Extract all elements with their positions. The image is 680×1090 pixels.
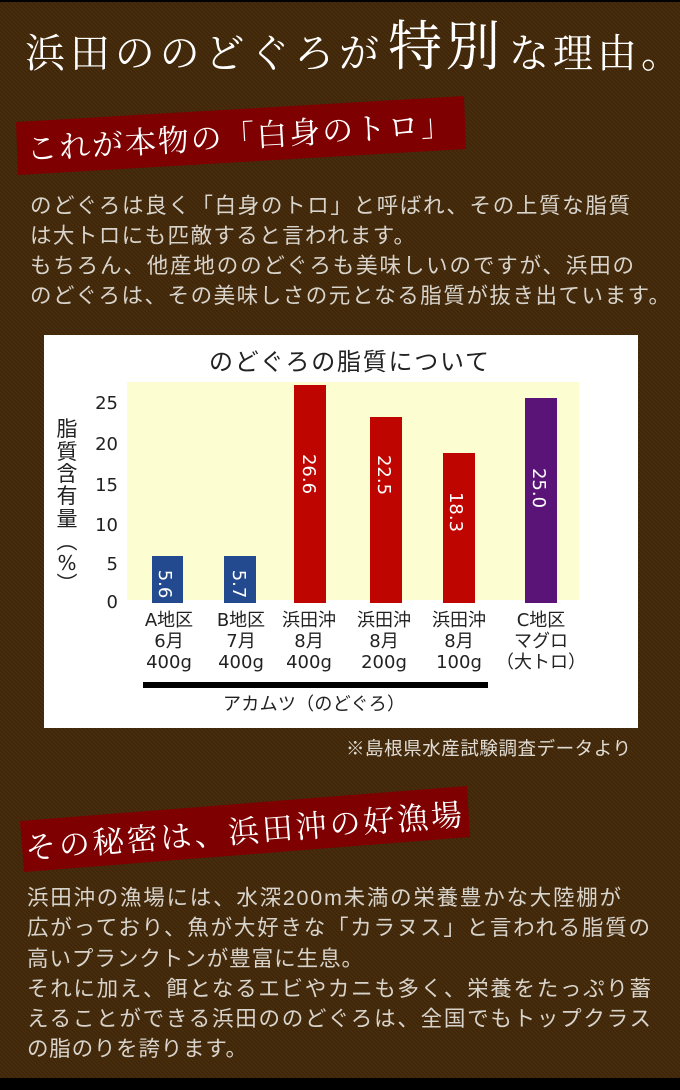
bar: B area 5.7 xyxy=(224,556,256,603)
y axis title: 有 xyxy=(56,485,78,508)
y axis tick labels: 5 xyxy=(107,554,118,575)
group bracket line xyxy=(143,682,488,688)
y axis title: （ xyxy=(54,530,77,552)
body text: fishing ground: 広がっており、魚が大好きな「カラヌス」と言われる脂質の xyxy=(27,916,650,940)
x axis category labels: 400g xyxy=(218,652,264,673)
bar: Hamada 100g 18.3: 18.3 xyxy=(445,492,466,532)
y axis title xyxy=(54,418,78,594)
body text: intro: もちろん、他産地ののどぐろも美味しいのですが、浜田の xyxy=(30,254,634,278)
y axis tick labels: 25 xyxy=(95,393,118,414)
x axis category labels: 8月 xyxy=(294,631,324,652)
title xyxy=(25,17,680,77)
y axis tick labels: 10 xyxy=(95,515,118,536)
title: な理由。 xyxy=(509,31,680,76)
y axis tick labels xyxy=(95,393,118,613)
bar: Hamada 400g 26.6: 26.6 xyxy=(298,454,319,494)
body text: fishing ground: それに加え、餌となるエビやカニも多く、栄養をたっぷり蓄 xyxy=(27,977,651,1001)
y axis title: ） xyxy=(54,572,77,594)
y axis tick labels: 15 xyxy=(95,475,118,496)
heading banner: real white-flesh toro: これが本物の「白身のトロ」 xyxy=(25,107,453,167)
body text: fishing ground: 浜田沖の漁場には、水深200m未満の栄養豊かな大陸棚が xyxy=(27,886,621,910)
title: 浜田ののどぐろが xyxy=(25,31,379,76)
x axis category labels: 6月 xyxy=(154,631,184,652)
chart title: のどぐろの脂質について xyxy=(209,349,489,376)
x axis category labels: 8月 xyxy=(369,631,399,652)
x axis category labels xyxy=(145,610,586,673)
title: 特別 xyxy=(388,17,500,77)
y axis title: 量 xyxy=(56,508,78,531)
bar: Hamada 400g 26.6 xyxy=(294,385,326,603)
body text: intro xyxy=(30,194,670,308)
x axis category labels: 400g xyxy=(146,652,192,673)
x axis category labels: 100g xyxy=(436,652,482,673)
bar: Hamada 200g 22.5 xyxy=(370,417,402,603)
x axis category labels: C地区 xyxy=(517,610,565,631)
body text: intro: は大トロにも匹敵すると言われます。 xyxy=(30,224,415,248)
y axis title: 含 xyxy=(56,463,78,486)
plot area xyxy=(127,382,579,600)
body text: fishing ground: の脂のりを誇ります。 xyxy=(27,1037,247,1061)
y axis title: % xyxy=(57,551,77,575)
bar: A area 5.6: 5.6 xyxy=(154,570,175,598)
x axis category labels: マグロ xyxy=(514,631,568,652)
source note: ※島根県水産試験調査データより xyxy=(346,738,631,759)
x axis category labels: （大トロ） xyxy=(496,652,586,673)
y axis title: 脂 xyxy=(56,418,78,441)
body text: intro: のどぐろは良く「白身のトロ」と呼ばれ、その上質な脂質 xyxy=(30,194,630,218)
bar: Hamada 200g 22.5: 22.5 xyxy=(373,455,394,495)
bar: C area tuna 25.0: 25.0 xyxy=(528,468,549,508)
x axis category labels: 200g xyxy=(361,652,407,673)
bar: C area tuna 25.0 xyxy=(525,398,557,603)
y axis tick labels: 20 xyxy=(95,434,118,455)
x axis category labels: 400g xyxy=(286,652,332,673)
x axis category labels: 8月 xyxy=(444,631,474,652)
x axis category labels: 7月 xyxy=(226,631,256,652)
x axis category labels: 浜田沖 xyxy=(432,610,486,631)
bar: A area 5.6 xyxy=(152,556,183,603)
y axis title: 質 xyxy=(56,441,78,464)
bar: Hamada 100g 18.3 xyxy=(443,453,475,603)
body text: fishing ground: えることができる浜田ののどぐろは、全国でもトップクラス xyxy=(27,1007,651,1031)
group label: アカムツ（のどぐろ） xyxy=(223,694,405,715)
x axis category labels: 浜田沖 xyxy=(357,610,411,631)
y axis tick labels: 0 xyxy=(107,592,118,613)
x axis category labels: A地区 xyxy=(145,610,193,631)
bar: B area 5.7: 5.7 xyxy=(228,570,249,598)
body text: fishing ground: 高いプランクトンが豊富に生息。 xyxy=(27,947,363,971)
x axis category labels: B地区 xyxy=(217,610,265,631)
x axis category labels: 浜田沖 xyxy=(282,610,336,631)
heading banner: secret of Hamada fishing ground: その秘密は、浜田沖の好漁場 xyxy=(24,797,463,866)
body text: fishing ground xyxy=(27,886,651,1061)
panel: fat content chart xyxy=(44,335,638,728)
body text: intro: のどぐろは、その美味しさの元となる脂質が抜き出ています。 xyxy=(30,284,670,308)
